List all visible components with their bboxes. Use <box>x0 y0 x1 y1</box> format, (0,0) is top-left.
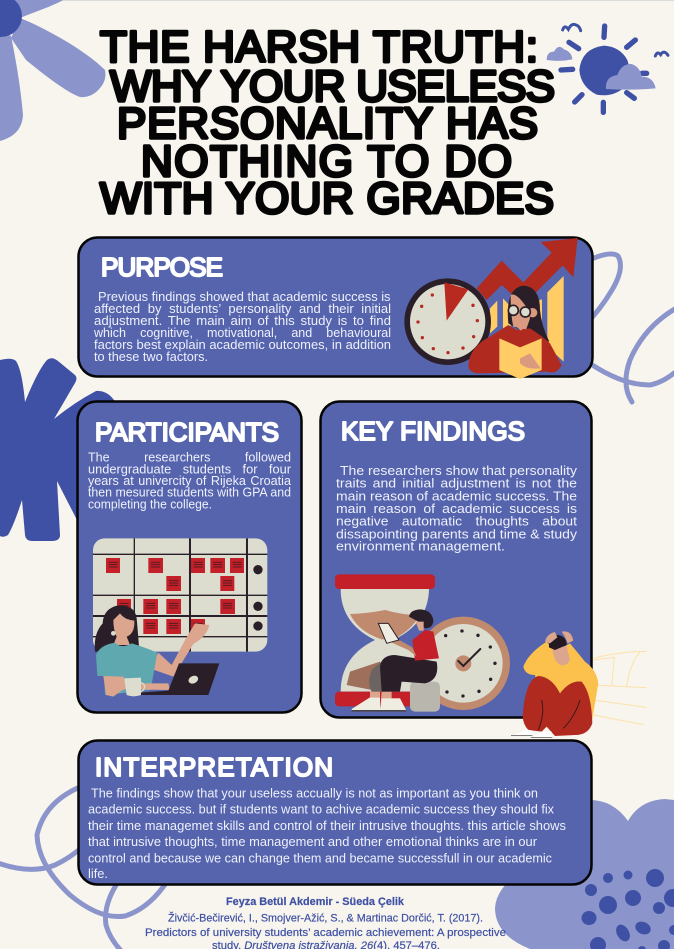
text: participants body: The researchers followed <box>88 450 291 465</box>
title: NOTHING TO DO <box>141 137 512 186</box>
heading: purpose: PURPOSE <box>101 252 223 282</box>
decoration: bottom-right flower with dots <box>495 799 674 949</box>
title: THE HARSH TRUTH: <box>100 22 538 72</box>
text: key findings body: main reason of academic success. The <box>336 488 577 503</box>
text: participants body: then mesured students with GPA and <box>88 485 291 500</box>
heading: key findings: KEY FINDINGS <box>341 416 525 446</box>
text: purpose body: to these two factors. <box>94 349 208 364</box>
text: interpretation body: academic success. but if students want to achive academic success they should fix <box>88 802 554 816</box>
text: participants body <box>88 450 292 511</box>
illustration: calendar board and woman with laptop <box>93 538 267 697</box>
decoration: top-left flower <box>0 0 105 141</box>
text: interpretation body: their time managemet skills and control of their intrusive thoughts. this article shows <box>88 818 566 833</box>
illustration: stressed man on sofa <box>511 631 647 737</box>
decoration: right loop lines <box>585 254 674 402</box>
text: purpose body: factors best explain academic outcomes, in addition <box>94 337 391 352</box>
panel: purpose <box>78 238 592 379</box>
panel: participants <box>78 402 302 712</box>
text: key findings body: traits and initial adjustment is not the <box>336 476 577 491</box>
decoration: bottom-left loop lines <box>0 785 168 949</box>
heading: interpretation: INTERPRETATION <box>95 752 333 782</box>
text: participants body: years at univercity of Rijeka Croatia <box>88 473 292 488</box>
panel: key findings <box>320 402 592 718</box>
heading: participants: PARTICIPANTS <box>95 417 279 447</box>
text: participants body: completing the college. <box>88 496 212 511</box>
icon: sun with clouds <box>547 24 668 112</box>
text: interpretation body: control and because we can change them and became successfull in our academic <box>88 850 552 866</box>
text: purpose body: Previous findings showed that academic success is <box>98 289 391 304</box>
text: key findings body: negative automatic thoughts about <box>336 514 577 529</box>
title: WITH YOUR GRADES <box>100 174 554 223</box>
credits and citation: Feyza Betül Akdemir - Süeda Çelik <box>226 896 405 908</box>
text: interpretation body: that intrusive thoughts, time management and other emotional thinks are in our <box>88 834 538 849</box>
credits and citation <box>145 896 506 949</box>
text: participants body: undergraduate students for four <box>88 461 292 476</box>
credits and citation: Živčić-Bečirević, I., Smojver-Ažić, S., & Martinac Dorčić, T. (2017). <box>168 912 483 925</box>
text: purpose body: which cognitive, motivational, and behavioural <box>93 325 391 340</box>
text: interpretation body <box>88 786 566 881</box>
text: key findings body: The researchers show that personality <box>340 463 578 478</box>
text: purpose body <box>93 289 391 364</box>
illustration: hourglass, clock and person with tablet <box>335 574 510 712</box>
text: key findings body: environment management. <box>336 539 505 554</box>
decoration: left dark flower <box>0 358 116 541</box>
text: interpretation body: The findings show that your useless accually is not as important as you think on <box>91 786 538 800</box>
text: key findings body: main reason of academic success is <box>336 501 578 516</box>
credits and citation: Predictors of university students’ academic achievement: A prospective <box>145 927 506 939</box>
title: WHY YOUR USELESS <box>110 62 555 111</box>
illustration: clock, rising arrow and reading woman <box>404 238 578 379</box>
panel: interpretation <box>78 740 592 884</box>
text: key findings body <box>336 463 578 554</box>
title <box>100 22 555 223</box>
text: purpose body: affected by students’ personality and their initial <box>94 301 391 316</box>
text: purpose body: adjustment. The main aim of this study is to find <box>94 313 391 328</box>
text: interpretation body: life. <box>88 866 108 881</box>
title: PERSONALITY HAS <box>117 99 538 148</box>
text: key findings body: dissapointing parents and time & study <box>336 526 578 541</box>
